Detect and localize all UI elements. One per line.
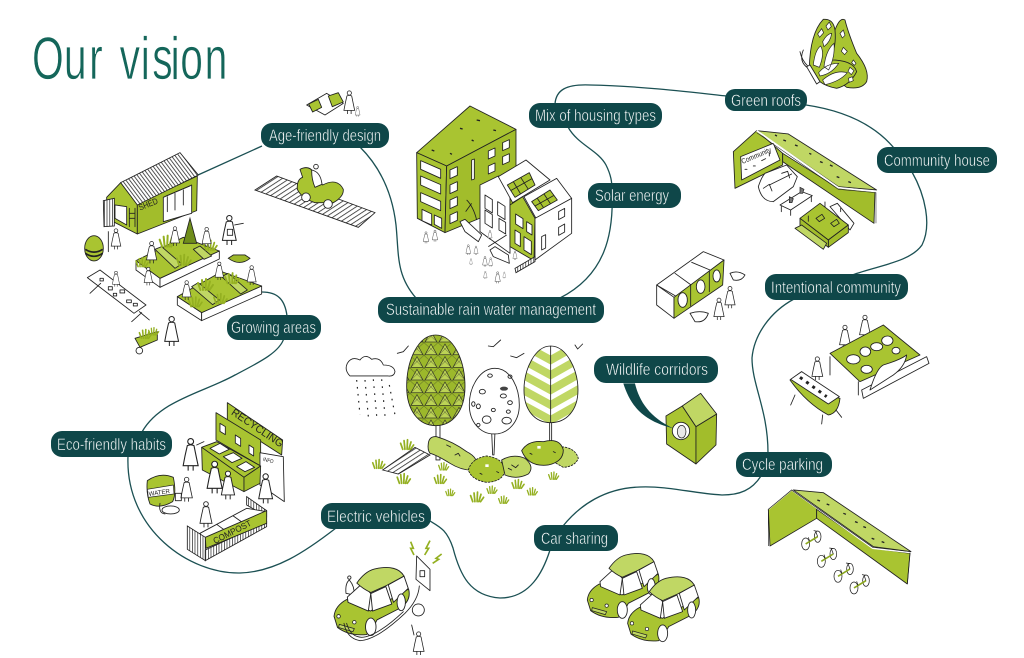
label: Wildlife corridors: Wildlife corridors: [606, 360, 708, 379]
shed: [103, 153, 198, 234]
front gardens and residents: [460, 219, 535, 283]
rain cloud: [346, 356, 395, 417]
recycling sign and wall: [216, 403, 285, 502]
label: Car sharing: Car sharing: [541, 529, 608, 548]
community house: [733, 131, 877, 249]
butterfly: [800, 19, 867, 88]
label: Mix of housing types: [529, 103, 662, 128]
striped leaf tree: [524, 346, 578, 440]
illustration: nesting box: [623, 383, 717, 464]
laundry machines: [657, 252, 745, 322]
label: Solar energy: [588, 183, 681, 208]
townhouses with solar panels: [466, 160, 572, 261]
label: Electric vehicles: Electric vehicles: [327, 507, 425, 526]
illustration: communal dining table and barbecue: [790, 315, 929, 424]
illustration: butterfly, community house and laundry: [657, 19, 877, 322]
label: Community house: Community house: [884, 151, 990, 170]
compost bays: COMPOST: [211, 518, 254, 546]
triangle-patterned tree: [407, 335, 465, 460]
label: Sustainable rain water management: Sustainable rain water management: [386, 300, 596, 319]
community house: Community: [740, 145, 773, 166]
illustration: electric car charging and car sharing: [334, 541, 699, 655]
shed: SHED: [137, 196, 159, 213]
charging point: [411, 541, 442, 655]
electric car: [334, 567, 424, 641]
label: Wildlife corridors: [594, 356, 718, 383]
compost barrel and person with spade: [85, 229, 121, 261]
illustration: housing with green roofs and solar panels: [417, 106, 572, 283]
people at recycling: [181, 439, 273, 527]
label: Sustainable rain water management: [378, 297, 604, 323]
person with apron and basket: [222, 215, 250, 262]
label: Cycle parking: [736, 452, 832, 477]
label: Growing areas: [227, 315, 321, 340]
shared cars: [587, 553, 699, 642]
label: Solar energy: Solar energy: [595, 186, 669, 205]
illustration: recycling, water and compost: [147, 403, 285, 561]
illustration: trees, hedges and rain: [346, 335, 583, 503]
water butt: [147, 475, 181, 514]
label: Eco-friendly habits: Eco-friendly habits: [57, 435, 166, 454]
title: Our vision: [32, 25, 227, 92]
stepping path: [383, 447, 430, 474]
label: Community house: [877, 147, 997, 173]
label: Green roofs: Green roofs: [731, 91, 801, 110]
label: Electric vehicles: [321, 503, 431, 529]
label: Intentional community: [765, 274, 908, 300]
spotted tree: [469, 368, 519, 455]
age-friendly bench and people: [307, 91, 360, 117]
label: Green roofs: [725, 89, 807, 111]
recycling sign and wall: INFO: [262, 457, 274, 465]
grass tufts: [373, 440, 559, 503]
potting table: [87, 270, 149, 322]
birds: [397, 340, 583, 358]
raised bed one: [136, 218, 219, 287]
label: Cycle parking: Cycle parking: [742, 455, 823, 474]
illustration: cycle shelter with bikes: [768, 490, 911, 594]
route line connecting the labels: [128, 85, 927, 598]
label: Intentional community: Intentional community: [771, 278, 901, 297]
label: Growing areas: Growing areas: [231, 318, 316, 337]
hedges and shrubs: [428, 437, 578, 482]
recycling sign and wall: RECYCLING: [229, 407, 285, 450]
illustration: growing areas and shed: [85, 91, 375, 354]
raised bed two: [177, 262, 262, 321]
recycling bins: [202, 442, 261, 492]
compost bays: [187, 497, 267, 561]
accessible path with mobility scooter: [255, 164, 375, 227]
label: Mix of housing types: Mix of housing types: [535, 106, 656, 125]
label: Car sharing: [534, 525, 618, 551]
label: Eco-friendly habits: [51, 431, 172, 457]
water butt: WATER: [148, 488, 171, 498]
apartment block: [417, 106, 516, 243]
label: Age-friendly design: [261, 123, 389, 148]
label: Age-friendly design: Age-friendly design: [269, 126, 381, 145]
wheelbarrow and gardener: [135, 316, 179, 354]
